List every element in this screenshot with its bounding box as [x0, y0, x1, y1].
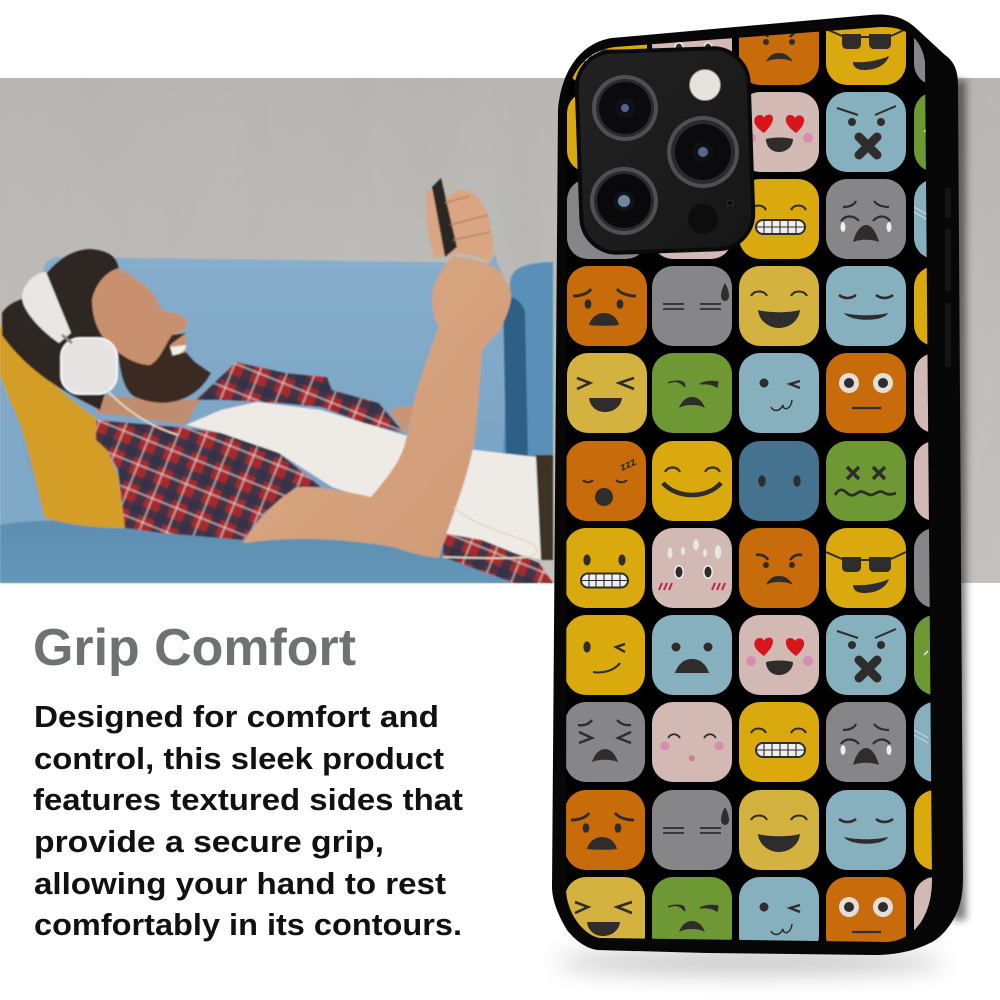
icon: blue tile [914, 181, 927, 258]
body text: allowing your hand to rest [34, 866, 446, 901]
icon: laughing emoji [739, 790, 819, 870]
small smartphone in hand [432, 178, 457, 257]
icon: crying emoji [826, 179, 906, 259]
icon: blank dots emoji [739, 441, 819, 521]
icon: sleeping emoji [566, 441, 646, 521]
mustard pillow [0, 325, 125, 528]
body text: Designed for comfort and [34, 699, 439, 734]
icon: awkward sweat emoji [652, 790, 732, 870]
white headphones [22, 272, 117, 394]
body text: provide a secure grip, [34, 824, 384, 859]
icon: gray tile [914, 38, 926, 82]
microphone [727, 200, 733, 206]
icon: sad emoji [652, 615, 732, 695]
lens: right [667, 116, 739, 188]
icon: staring emoji [826, 877, 906, 957]
icon: yellow tile [914, 790, 994, 870]
sensor [688, 204, 718, 234]
icon: sunglasses emoji [826, 27, 906, 85]
icon: annoyed emoji [652, 877, 732, 957]
heading: Grip Comfort [33, 619, 356, 677]
emoji pattern [566, 27, 932, 942]
icon: crying emoji [826, 702, 906, 782]
icon: green tile [914, 615, 994, 695]
white t-shirt [186, 402, 541, 560]
neck [96, 395, 200, 425]
icon: wide smile emoji [652, 441, 732, 521]
phone case [552, 5, 994, 957]
camera module [576, 47, 754, 254]
icon: laughing emoji [739, 266, 819, 346]
earphone cable [103, 386, 537, 558]
body text: comfortably in its contours. [34, 907, 462, 942]
icon: pink tile [914, 877, 994, 957]
icon: sweating emoji [652, 38, 732, 52]
icon: pink tile [914, 442, 929, 520]
icon: squeezed eyes emoji [567, 353, 647, 433]
icon: blue tile [914, 702, 994, 782]
sofa [0, 253, 553, 583]
lifestyle photo: man on sofa [0, 178, 553, 583]
icon: winking emoji [565, 615, 645, 695]
icon: staring emoji [826, 353, 906, 433]
lens: top left [592, 75, 658, 141]
icon: calm emoji [826, 266, 906, 346]
icon: sweating emoji [652, 528, 732, 608]
icon: blushing emoji [658, 250, 728, 259]
body text: control, this sleek product [34, 741, 444, 776]
finger lines [445, 196, 490, 240]
phone shadow [555, 80, 966, 973]
forearm and lower hand [243, 256, 511, 558]
icon: toothy emoji [739, 702, 819, 782]
side buttons [945, 188, 951, 367]
icon: grinning emoji [572, 44, 647, 81]
icon: worried emoji [565, 790, 645, 870]
icon: annoyed emoji [652, 353, 732, 433]
icon: crossed mouth emoji [826, 92, 906, 172]
body text [33, 699, 463, 942]
upper hand holding phone [426, 190, 493, 262]
concrete wall [0, 78, 1000, 583]
icon: crossed mouth emoji [826, 615, 906, 695]
icon: sad emoji [652, 92, 732, 172]
icon: toothy emoji [739, 179, 819, 259]
icon: cute wink emoji [739, 877, 819, 957]
icon: awkward sweat emoji [652, 266, 732, 346]
icon: worried emoji [567, 266, 647, 346]
icon: squeezed eyes emoji [565, 877, 645, 957]
icon: squinting emoji [565, 702, 645, 782]
icon: pink tile [914, 354, 928, 432]
icon: sunglasses emoji [826, 528, 906, 608]
icon: heart eyes emoji [739, 615, 819, 695]
icon: heart eyes emoji [751, 92, 819, 172]
icon: green tile [914, 94, 926, 170]
plaid shirt [96, 362, 553, 583]
icon: dizzy emoji [826, 441, 906, 521]
lens: bottom left [590, 167, 658, 235]
camera housing [576, 47, 754, 254]
icon: grinning emoji [565, 528, 645, 608]
flash [690, 70, 720, 100]
icon: yellow tile [914, 268, 928, 345]
icon: cute wink emoji [739, 353, 819, 433]
icon: squinting emoji [567, 182, 640, 259]
icon: angry emoji [739, 528, 819, 608]
icon: angry emoji [739, 32, 819, 85]
icon: blushing emoji [652, 702, 732, 782]
black case body [552, 15, 963, 955]
icon: winking emoji [567, 96, 578, 170]
body text: features textured sides that [33, 782, 463, 817]
icon: gray tile [914, 529, 930, 608]
icon: calm emoji [826, 790, 906, 870]
jeans and belt [536, 455, 553, 560]
head: hair, face, beard [2, 249, 211, 410]
